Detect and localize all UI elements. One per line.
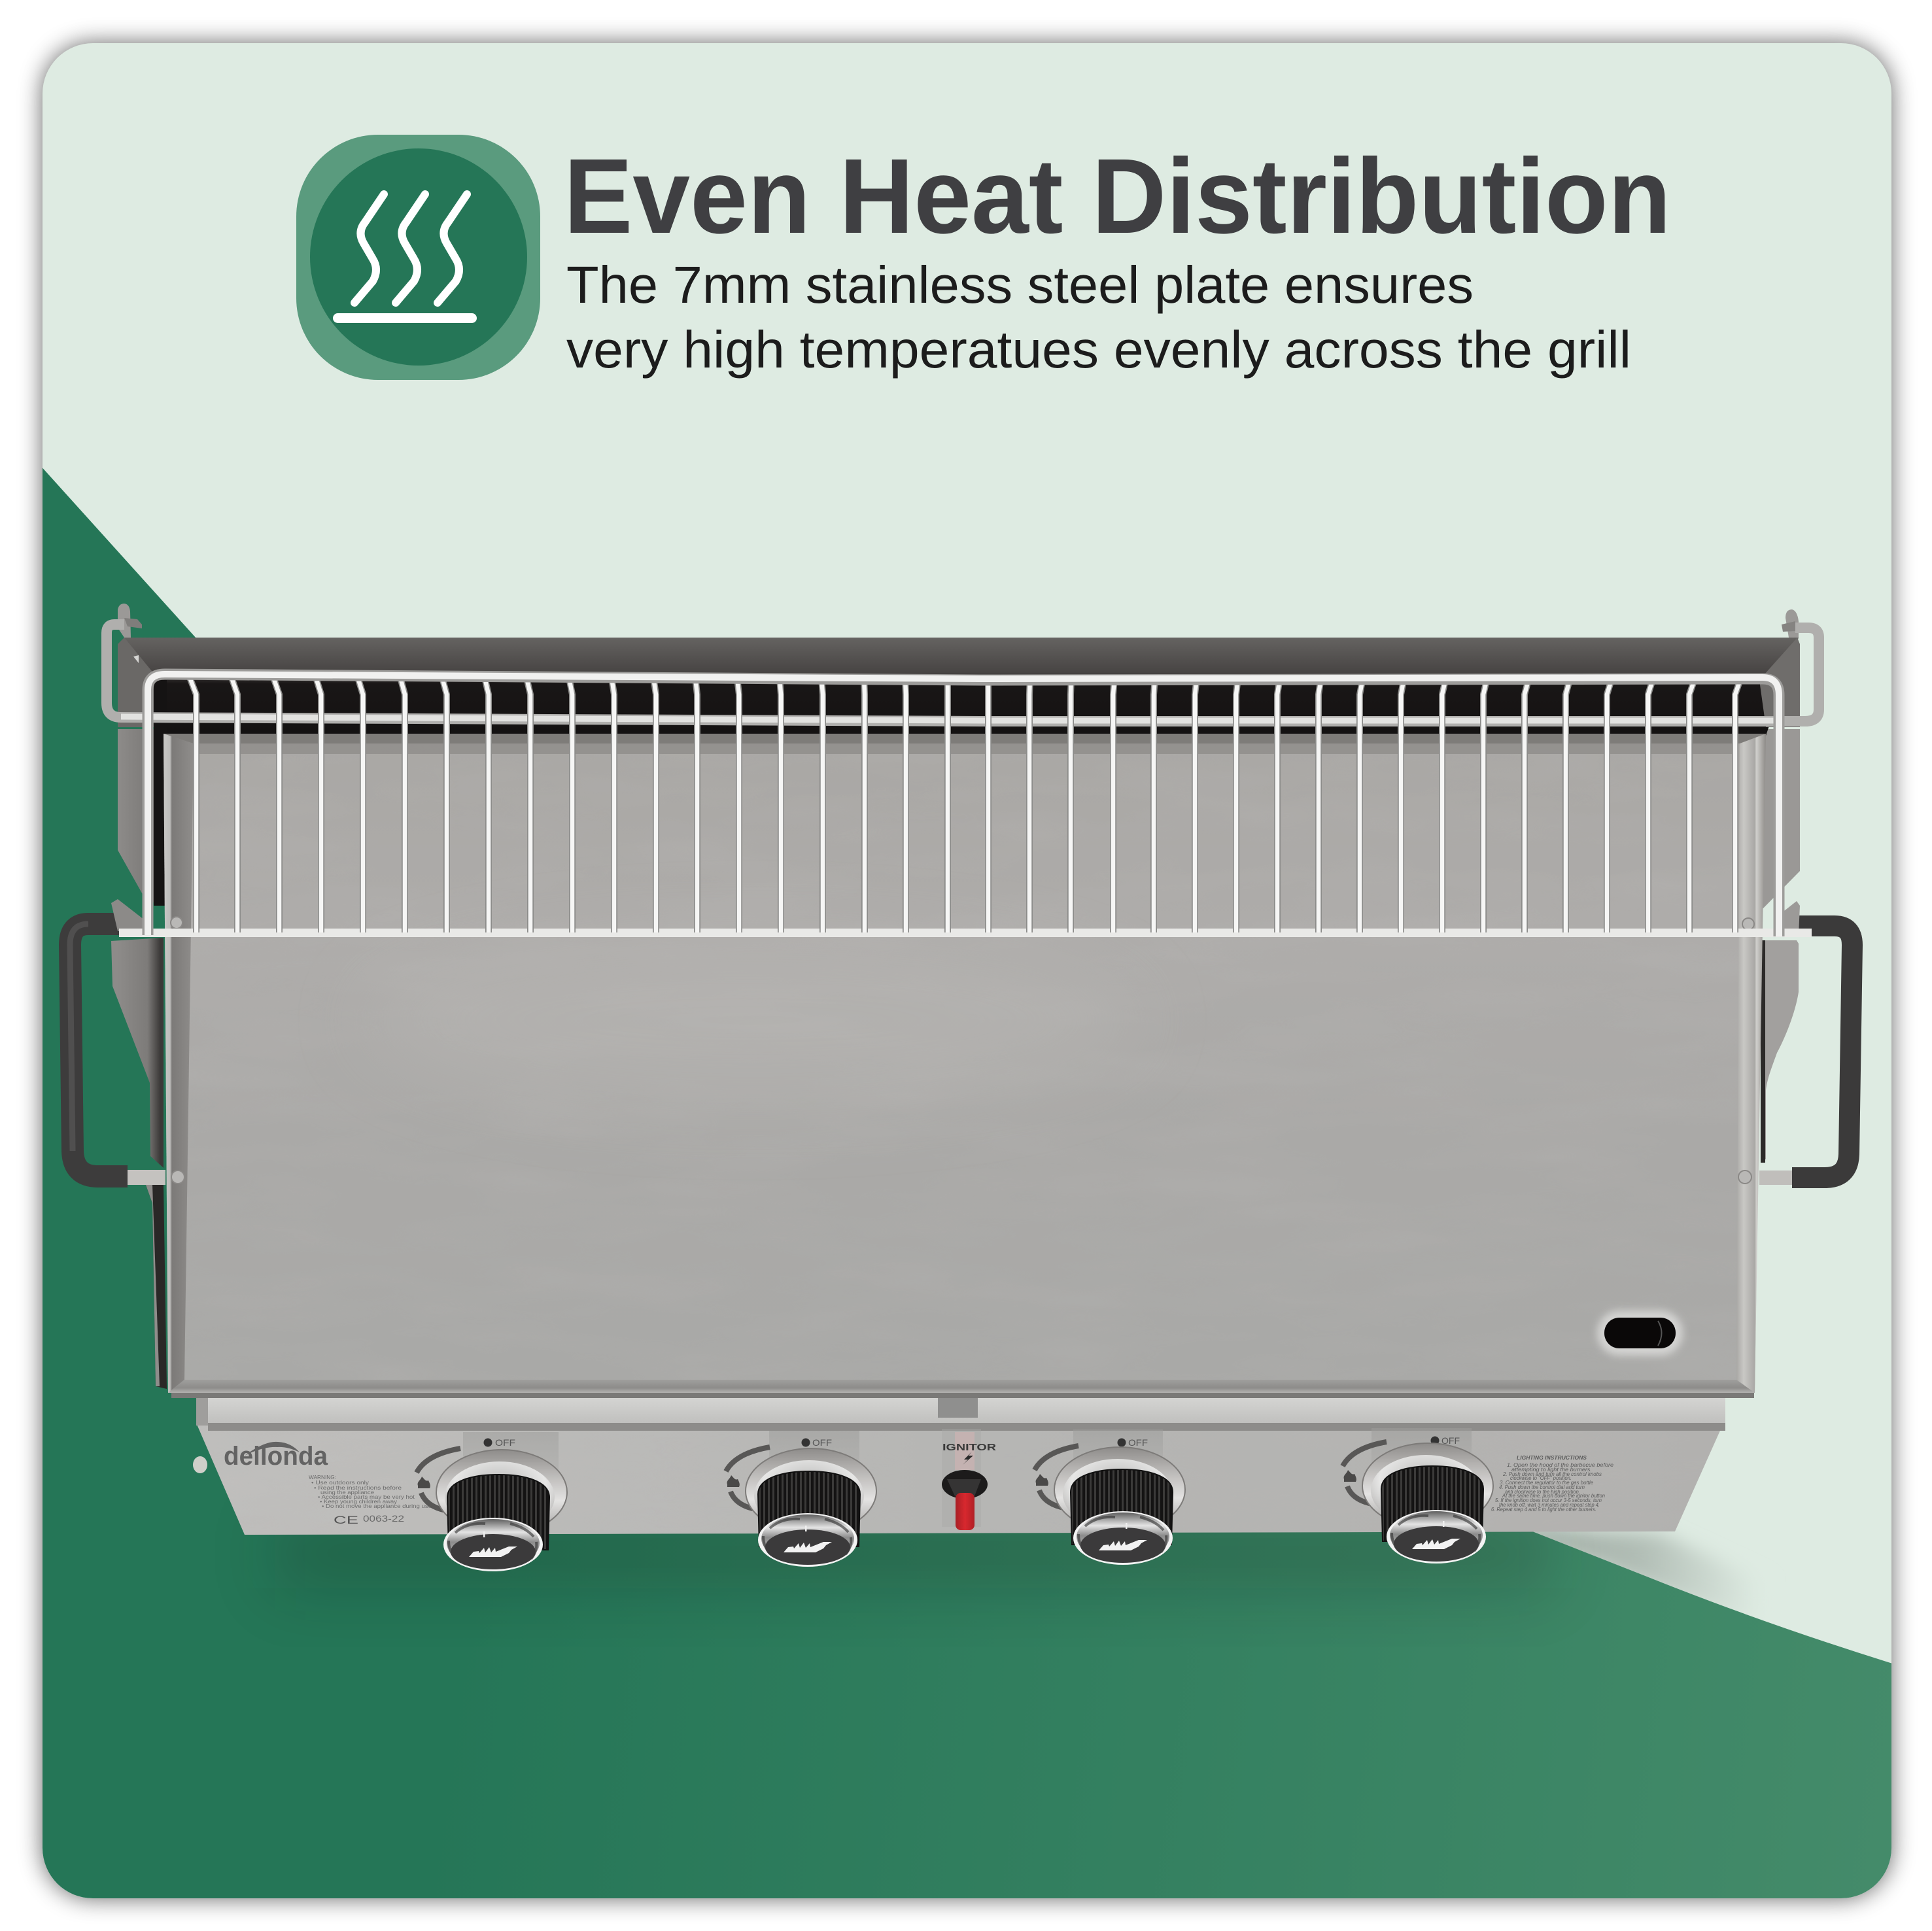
front rim xyxy=(168,1380,1755,1393)
lighting instructions: attempting to light the burners. xyxy=(1511,1467,1592,1473)
front lip xyxy=(196,1398,1725,1423)
warning text xyxy=(309,1474,432,1509)
center notch xyxy=(938,1398,978,1418)
knob 3: OFF xyxy=(1128,1437,1148,1448)
left rim xyxy=(164,734,194,1393)
lighting instructions xyxy=(1491,1455,1614,1512)
warning text: WARNING: xyxy=(309,1474,336,1480)
shadow under the grill xyxy=(275,1517,1550,1589)
warning text: • Keep young children away xyxy=(320,1498,398,1505)
lighting instructions: 1. Open the hood of the barbecue before xyxy=(1507,1462,1614,1468)
lighting instructions: 3. Connect the regulator to the gas bottle xyxy=(1500,1480,1594,1486)
warning text: • Read the instructions before xyxy=(314,1484,402,1491)
under-lip shade xyxy=(208,1422,1725,1431)
warning text: • Accessible parts may be very hot xyxy=(318,1494,415,1500)
CE mark xyxy=(334,1513,404,1526)
front rod xyxy=(119,929,1812,937)
right handle xyxy=(1759,926,1852,1185)
lighting instructions: anti clockwise to the high position. xyxy=(1505,1489,1580,1495)
ignitor xyxy=(942,1429,997,1530)
vertical wires xyxy=(190,677,1741,932)
lighting instructions: At the same time, push down the ignitor button xyxy=(1502,1493,1606,1499)
knob 2 xyxy=(726,1431,876,1567)
knob 1: OFF xyxy=(495,1437,515,1448)
knob 4: OFF xyxy=(1441,1435,1460,1446)
warning text: using the appliance xyxy=(320,1489,374,1495)
left side panels xyxy=(111,729,167,1389)
CE mark: 0063-22 xyxy=(363,1513,404,1524)
left bracket and wing nut xyxy=(118,604,142,638)
knob 3 xyxy=(1035,1429,1185,1565)
right side panels xyxy=(1759,729,1800,1163)
right bracket and wing nut xyxy=(1782,609,1799,638)
right rim xyxy=(1736,734,1766,1393)
control panel gap xyxy=(171,1393,1754,1398)
panel body xyxy=(196,1419,1725,1535)
dark gap left of plate xyxy=(154,680,167,906)
vertical wires shadow xyxy=(190,677,1741,932)
grill product xyxy=(70,604,1852,1571)
title: Even Heat Distribution xyxy=(564,136,1671,256)
icon: heat waves badge xyxy=(296,135,540,380)
lighting instructions: the knob off, wait 3 minutes and repeat step 4. xyxy=(1499,1502,1600,1508)
knob 1 xyxy=(417,1432,567,1571)
knob 4 xyxy=(1343,1428,1493,1564)
knob 2: OFF xyxy=(812,1437,832,1448)
lighting instructions: 6. Repeat step 4 and 5 to light the other burners. xyxy=(1491,1507,1596,1512)
rear rod with hooks xyxy=(107,624,1819,721)
side wedges of back wall xyxy=(118,638,1800,727)
brushed steel texture xyxy=(184,745,1740,1380)
brand logo: dellonda xyxy=(224,1442,328,1471)
warning text: • Do not move the appliance during use xyxy=(322,1503,432,1509)
back wall xyxy=(124,638,1799,736)
lighting instructions: 2. Push down and turn all the control knobs xyxy=(1502,1471,1602,1477)
soft sheen xyxy=(360,935,1145,1105)
green background swoosh xyxy=(39,464,1897,1903)
grease slot xyxy=(1597,1310,1683,1356)
lighting instructions: LIGHTING INSTRUCTIONS xyxy=(1517,1455,1587,1461)
subtitle text: very high temperatues evenly across the grill xyxy=(566,320,1631,379)
lighting instructions: 5. If the ignition does not occur 3-5 seconds, turn xyxy=(1495,1497,1602,1503)
wire rack xyxy=(107,624,1819,937)
left handle xyxy=(70,924,165,1185)
griddle plate xyxy=(164,734,1766,1393)
small screw at left of panel xyxy=(193,1456,207,1473)
ignitor: IGNITOR xyxy=(942,1443,997,1453)
control panel xyxy=(193,1398,1725,1571)
rear rim strip xyxy=(164,734,1765,743)
lighting instructions: 4. Push down the control dial and turn xyxy=(1499,1484,1585,1490)
shadow on light background beneath the grill xyxy=(1534,1531,1738,1609)
warning text: • Use outdoors only xyxy=(311,1479,370,1486)
lighting instructions: clockwise to "OFF" position. xyxy=(1510,1475,1572,1481)
subtitle text xyxy=(566,256,1631,379)
rack frame xyxy=(148,674,1779,936)
bolts xyxy=(171,917,1754,1184)
CE mark: CE xyxy=(334,1514,358,1526)
subtitle text: The 7mm stainless steel plate ensures xyxy=(566,256,1474,314)
